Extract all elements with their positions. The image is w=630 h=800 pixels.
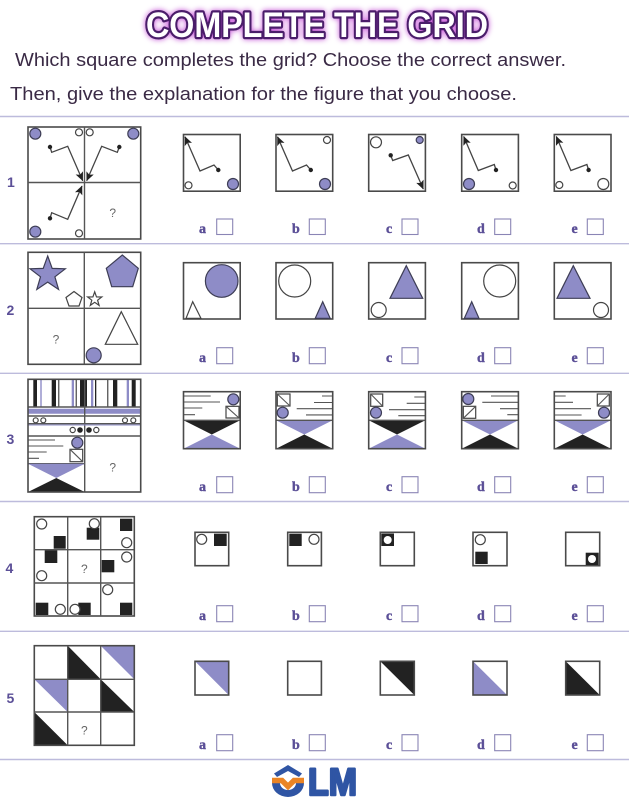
option 5a [195,661,229,695]
option 3c [369,392,425,449]
option 1a [184,134,240,191]
puzzle grid 1: ? [109,206,116,220]
option 4b [288,532,321,566]
answer choices 4: b [292,609,300,624]
option 4a [195,532,229,566]
instruction line 1: Which square completes the grid? Choose the correct answer. [15,50,566,70]
answer choices 3: b [292,480,300,495]
answer choices 3 [199,477,603,495]
puzzle grid 4: ? [81,562,88,576]
option 4e [566,532,600,566]
answer choices 5: d [477,738,485,753]
option 3b [276,392,333,449]
puzzle grid 2 [28,252,141,364]
answer choices 4 [199,606,603,624]
panel: question 2 [6,252,611,366]
answer choices 1: d [477,222,485,237]
option 1e [554,134,611,191]
answer choices 5: a [199,738,206,753]
answer choices 1: b [292,222,300,237]
puzzle grid 5 [34,646,134,745]
puzzle grid 5: ? [81,724,88,738]
answer choices 4: e [572,609,578,624]
question number 5: 5 [6,690,14,706]
option 2a [184,263,240,319]
instruction line 2: Then, give the explanation for the figure that you choose. [10,84,517,104]
question number 1: 1 [7,174,15,190]
puzzle grid 3: ? [109,460,116,474]
answer choices 2: e [572,351,578,366]
answer choices 4: c [386,609,392,624]
option 5b [288,661,321,695]
answer choices 2 [199,348,603,366]
option 5e [566,661,600,695]
option 3d [462,392,518,449]
answer choices 3: a [199,480,206,495]
answer choices 5: c [386,738,392,753]
option 2e [554,263,611,319]
answer choices 2: c [386,351,392,366]
answer choices 5 [199,735,603,753]
panel: question 1 [7,127,611,239]
panel: question 3 [6,379,611,495]
answer choices 5: b [292,738,300,753]
option 1b [276,134,333,191]
answer choices 5: e [572,738,578,753]
answer choices 1: a [199,222,206,237]
answer choices 1: c [386,222,392,237]
option 5c [380,661,414,695]
option 2b [276,263,333,319]
answer choices 1: e [572,222,578,237]
answer choices 2: a [199,351,206,366]
option 3e [554,392,611,449]
option 5d [473,661,507,695]
question number 2: 2 [6,302,14,318]
question number 3: 3 [6,431,14,447]
panel: question 5 [6,646,603,753]
answer choices 3: d [477,480,485,495]
option 4c [380,532,414,566]
answer choices 4: d [477,609,485,624]
option 2c [369,263,425,319]
answer choices 1 [199,219,603,237]
answer choices 3: c [386,480,392,495]
option 1d [462,134,518,191]
puzzle grid 1 [28,127,141,239]
panel: question 4 [6,517,603,624]
option 1c [369,134,425,191]
title: COMPLETE THE GRID [146,6,488,45]
option 4d [473,532,507,566]
answer choices 3: e [572,480,578,495]
puzzle grid 2: ? [53,332,60,346]
option 2d [462,263,518,319]
answer choices 4: a [199,609,206,624]
question number 4: 4 [6,560,14,576]
puzzle grid 4 [34,517,134,616]
answer choices 2: b [292,351,300,366]
option 3a [184,392,240,449]
answer choices 2: d [477,351,485,366]
puzzle grid 3 [28,379,141,492]
logo: GLM [272,762,357,800]
